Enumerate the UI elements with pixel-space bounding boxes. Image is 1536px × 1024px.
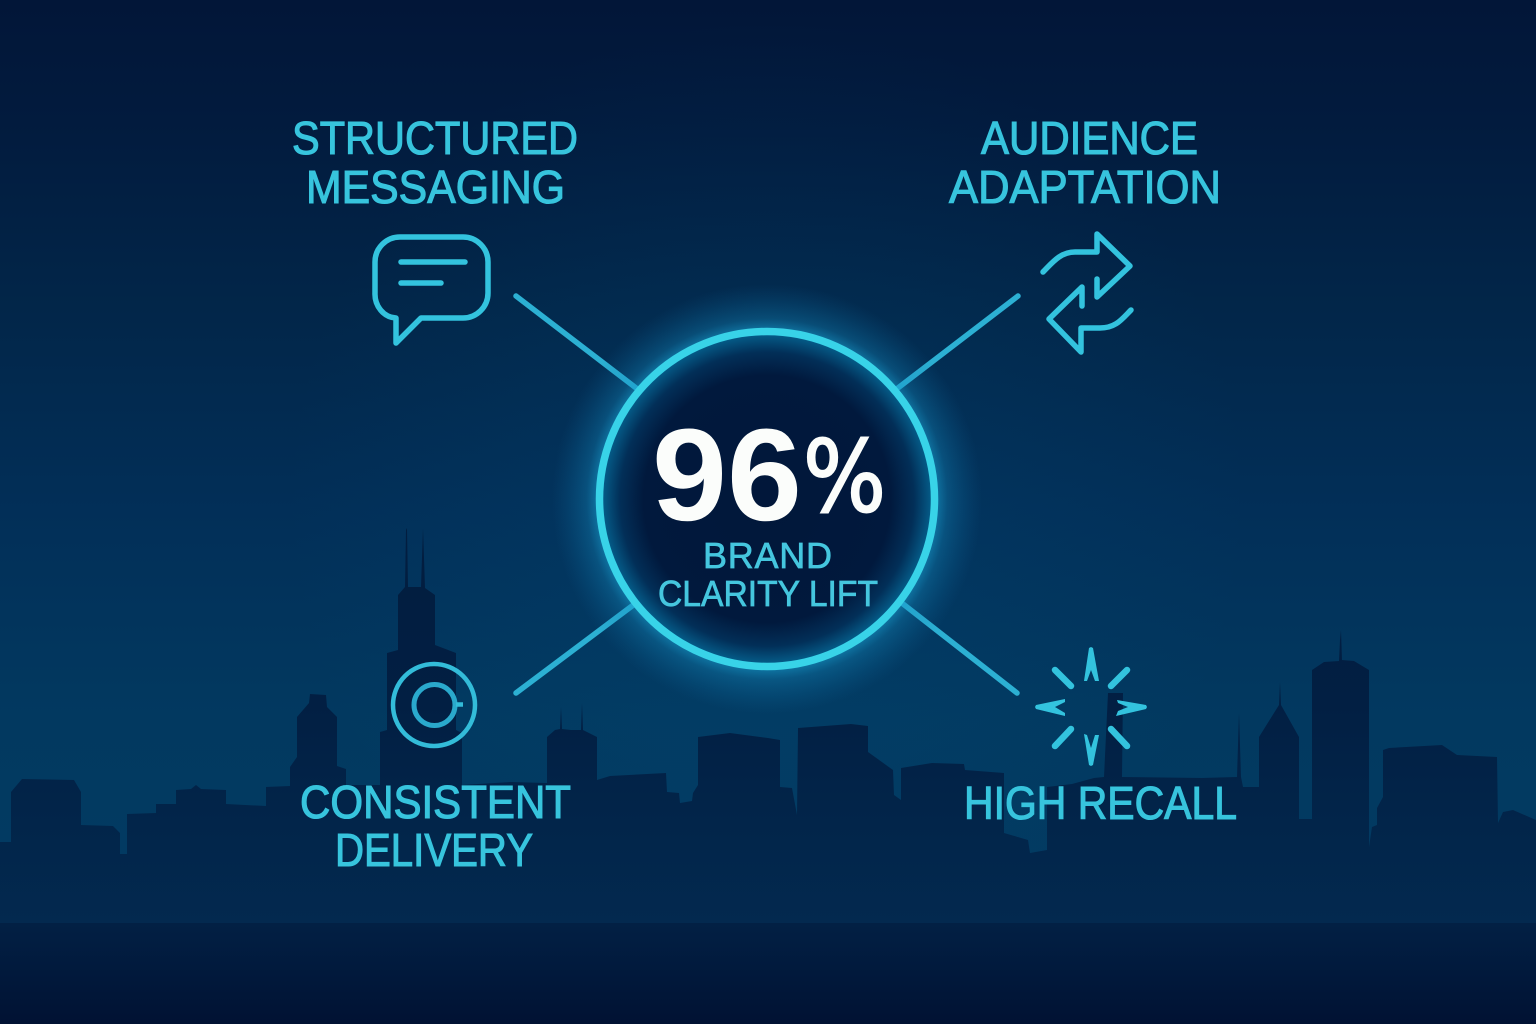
label: Consistent Delivery: CONSISTENT (300, 776, 571, 828)
outer glow (552, 284, 982, 714)
label: Structured Messaging: MESSAGING (306, 161, 565, 213)
caption line: BRAND: BRAND (703, 535, 832, 576)
city skyline silhouette (0, 528, 1536, 923)
caption line: CLARITY LIFT: CLARITY LIFT (658, 573, 878, 614)
icon: speech bubble (375, 237, 488, 343)
central metric circle (552, 284, 982, 714)
label: Audience Adaptation (949, 112, 1221, 213)
icon: recall burst (1035, 647, 1147, 766)
glowing ring (600, 332, 934, 666)
label: High Recall: HIGH RECALL (964, 777, 1237, 829)
connector: bottom left (516, 600, 640, 693)
icon: swap arrows (1043, 234, 1131, 352)
label: Consistent Delivery: DELIVERY (335, 824, 533, 876)
icon: target circle (393, 664, 475, 746)
waterfront band (0, 923, 1536, 1024)
label: Audience Adaptation: ADAPTATION (949, 161, 1221, 213)
connector: top left (516, 296, 640, 391)
value: 96: 96 (652, 401, 802, 548)
connector: bottom right (898, 600, 1017, 693)
label: Structured Messaging (292, 112, 578, 213)
dark disc (600, 332, 934, 666)
percent sign: % (803, 420, 886, 535)
label: Structured Messaging: STRUCTURED (292, 112, 578, 164)
connector: top right (894, 296, 1018, 391)
label: Audience Adaptation: AUDIENCE (981, 112, 1198, 164)
label: Consistent Delivery (300, 776, 571, 876)
